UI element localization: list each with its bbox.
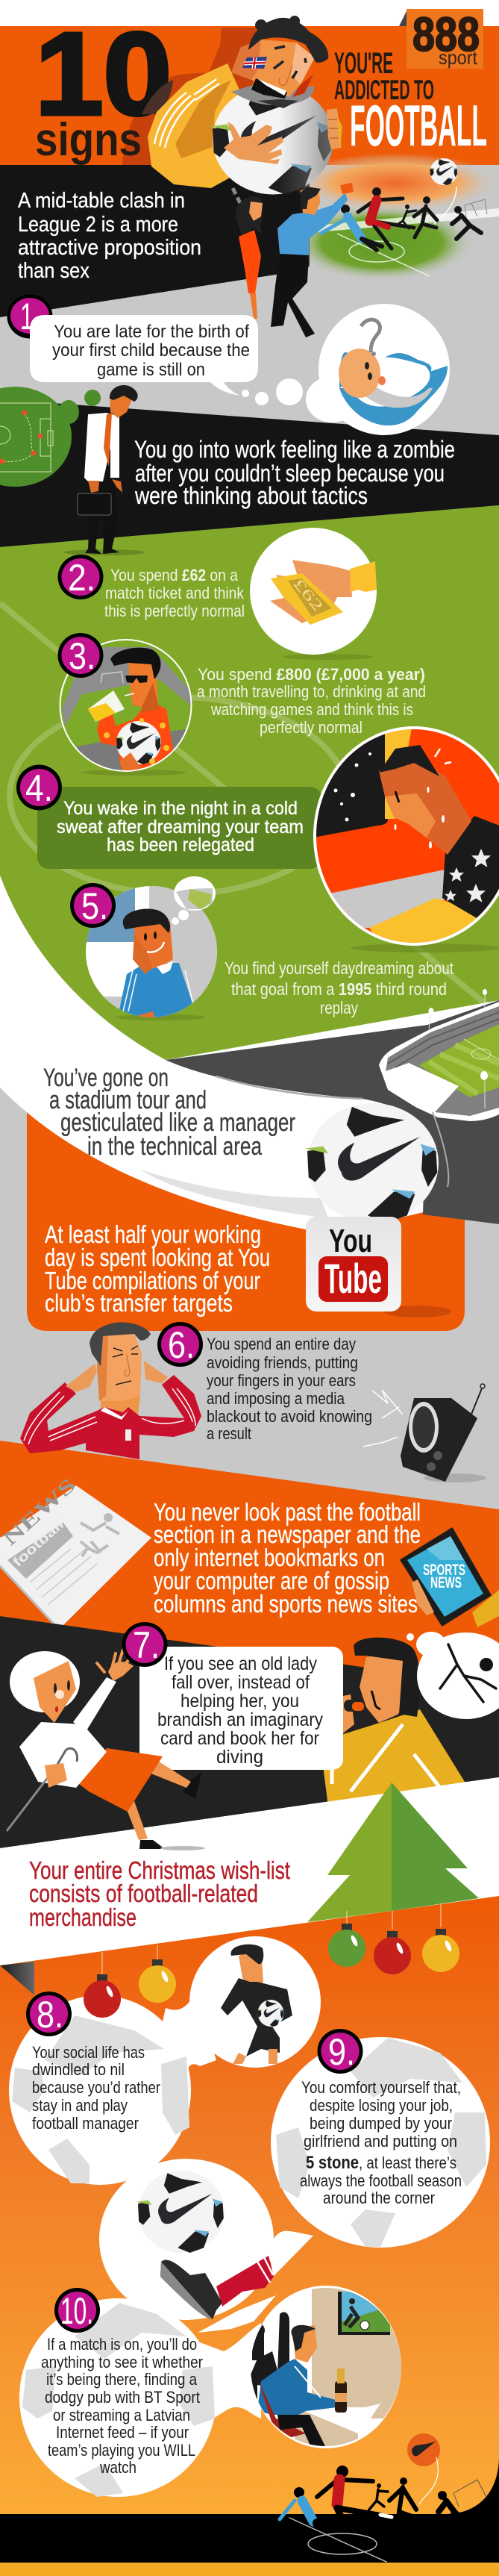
old lady falling bbox=[7, 1650, 205, 1850]
sign 5: illustration bbox=[86, 876, 220, 1020]
sign 5: text bbox=[225, 958, 454, 1017]
newspaper text bbox=[154, 1498, 421, 1618]
sign 5: text: that goal from a 1995 third round bbox=[231, 979, 447, 999]
sign 6: man with fingers in ears bbox=[20, 1322, 201, 1459]
ten overlap tint bbox=[142, 80, 173, 114]
stadium tour text: in the technical area bbox=[87, 1132, 262, 1161]
sign 1: speech bubble bbox=[30, 315, 258, 396]
christmas tree bbox=[307, 1783, 479, 1922]
sign 3: text: perfectly normal bbox=[260, 718, 363, 737]
newspaper text: columns and sports news sites bbox=[154, 1590, 418, 1618]
sign 6: text: blackout to avoid knowing bbox=[207, 1407, 372, 1426]
sign 9: badge bbox=[318, 2029, 363, 2074]
intro text: attractive proposition bbox=[18, 236, 201, 260]
woman bbox=[236, 196, 263, 319]
sign 9: text: being dumped by your bbox=[310, 2114, 452, 2133]
YouTube text: At least half your working bbox=[45, 1220, 261, 1248]
grey swoosh bbox=[140, 1170, 328, 1218]
sign 8: text: dwindled to nil bbox=[32, 2060, 125, 2079]
logo: 888 sport: sport bbox=[439, 46, 478, 69]
christmas text bbox=[29, 1856, 290, 1931]
sign 4: text bbox=[57, 798, 304, 855]
sign 9: text: 5 stone, at least there’s bbox=[306, 2153, 456, 2173]
newspaper text: You never look past the football bbox=[154, 1498, 421, 1526]
sign 9: text: girlfriend and putting on bbox=[304, 2132, 457, 2151]
stadium tour text: a stadium tour and bbox=[49, 1086, 207, 1114]
sign 1: speech bubble: You are late for the birth of bbox=[54, 322, 249, 342]
christmas text: merchandise bbox=[29, 1903, 136, 1931]
white football blobs bbox=[9, 1936, 490, 2497]
sign 7: badge bbox=[122, 1622, 167, 1667]
intro text bbox=[18, 189, 201, 283]
sign 9: text: You comfort yourself that, bbox=[301, 2078, 461, 2097]
orange diagonal band bbox=[0, 1441, 499, 1688]
stadium tour text: You’ve gone on bbox=[43, 1064, 169, 1092]
tablet: SPORTS bbox=[423, 1562, 465, 1579]
orange lower section bbox=[0, 1896, 499, 2514]
black intro panel bbox=[0, 165, 310, 317]
pitch scene bbox=[289, 153, 499, 281]
logo: 888 sport bbox=[399, 7, 483, 69]
sign 7: text box: brandish an imaginary bbox=[157, 1709, 323, 1730]
sign 8: badge bbox=[26, 1992, 72, 2036]
sign 10: text: If a match is on, you’ll do bbox=[47, 2335, 197, 2354]
bottom players silhouettes bbox=[280, 2466, 486, 2562]
flag on cheek bbox=[242, 57, 267, 69]
title: signs: signs bbox=[35, 114, 142, 166]
sign 7: text box: If you see an old lady bbox=[164, 1653, 317, 1674]
sign 6: text: and imposing a media bbox=[207, 1389, 345, 1408]
sign 9: text: always the football season bbox=[300, 2171, 462, 2190]
sign 1: speech bubble: game is still on bbox=[97, 360, 205, 380]
sign 10: text: Internet feed – if your bbox=[56, 2423, 189, 2442]
sign 1: speech bubble: your first child because the bbox=[52, 340, 250, 361]
YouTube text: Tube compilations of your bbox=[45, 1267, 260, 1294]
YouTube text: club’s transfer targets bbox=[45, 1289, 233, 1317]
newspaper: football bbox=[10, 1517, 66, 1570]
dark triangle fold bbox=[0, 1962, 34, 1995]
YouTube icon bbox=[306, 1217, 451, 1317]
sign 10: badge bbox=[54, 2288, 100, 2333]
sign 2: text bbox=[104, 566, 245, 620]
black footer bbox=[0, 2456, 499, 2576]
sign 2: badge: 2. bbox=[68, 557, 95, 599]
sign 5: text: You find yourself daydreaming about bbox=[225, 958, 454, 978]
intro text: League 2 is a more bbox=[18, 213, 178, 237]
sign 6: text: You spend an entire day bbox=[207, 1335, 356, 1353]
dark stadium wave bbox=[166, 1000, 499, 1224]
sign 8: text: football manager bbox=[32, 2114, 139, 2133]
sign 3: text: a month travelling to, drinking at and bbox=[197, 682, 426, 701]
intro text: A mid-table clash in bbox=[18, 189, 185, 213]
sign 10: text bbox=[41, 2335, 203, 2477]
sign 7: badge: 7. bbox=[133, 1624, 160, 1666]
tactics text: were thinking about tactics bbox=[134, 482, 368, 509]
thought bubble: dive bbox=[407, 1632, 499, 1719]
sign 4: text: has been relegated bbox=[107, 835, 254, 855]
sign 3: text: watching games and think this is bbox=[210, 700, 413, 719]
header backdrop shape bbox=[122, 28, 256, 165]
sign 5: badge bbox=[70, 883, 116, 928]
sign 5: badge: 5. bbox=[81, 885, 108, 927]
sign 6: text: avoiding friends, putting bbox=[207, 1353, 358, 1372]
black band: tactics bbox=[0, 399, 499, 547]
YouTube icon: You bbox=[329, 1223, 372, 1259]
referee bbox=[271, 183, 354, 337]
ball and boot bbox=[136, 2171, 274, 2319]
players silhouettes bbox=[321, 187, 481, 250]
YouTube text: day is spent looking at You bbox=[45, 1244, 270, 1271]
sign 8: text: stay in and play bbox=[32, 2096, 128, 2115]
christmas text: Your entire Christmas wish-list bbox=[29, 1856, 290, 1884]
football flying bbox=[430, 158, 458, 185]
white wave bbox=[0, 876, 499, 1229]
stadium bbox=[379, 989, 499, 1121]
sign 1: badge bbox=[7, 294, 52, 339]
sign 4: text: sweat after dreaming your team bbox=[57, 817, 304, 838]
sign 7: text box bbox=[139, 1647, 343, 1770]
title: 10: 10 bbox=[35, 9, 172, 140]
sign 4: panel bbox=[37, 787, 321, 869]
newspaper text: only internet bookmarks on bbox=[154, 1544, 385, 1571]
black band: diving bbox=[0, 1616, 499, 1848]
sign 9: text: despite losing your job, bbox=[310, 2096, 453, 2115]
sign 7: text box: card and book her for bbox=[160, 1728, 319, 1749]
man hugging ball bbox=[148, 16, 342, 194]
referee with whistle bbox=[321, 1638, 465, 1806]
stadium tour text: gesticulated like a manager bbox=[60, 1108, 295, 1137]
pitch markings on green bbox=[0, 603, 499, 1015]
sign 8: text: Your social life has bbox=[32, 2043, 145, 2062]
sign 5: text: replay bbox=[320, 998, 358, 1017]
sign 3: illustration bbox=[60, 639, 194, 776]
white christmas area bbox=[0, 1777, 499, 1965]
sign 4: text: You wake in the night in a cold bbox=[63, 798, 298, 819]
sign 6: text bbox=[207, 1335, 372, 1443]
sign 10: badge: 10. bbox=[60, 2290, 93, 2332]
newspaper text: section in a newspaper and the bbox=[154, 1521, 421, 1548]
sign 2: text: this is perfectly normal bbox=[104, 602, 245, 620]
sign 10: text: or streaming a Latvian bbox=[53, 2406, 190, 2424]
sign 10: text: anything to see it whether bbox=[41, 2353, 203, 2371]
title: you're addicted to: YOU'RE bbox=[334, 47, 393, 80]
sign 10: pub scene bbox=[245, 2288, 405, 2452]
tablet: NEWS bbox=[430, 1574, 462, 1591]
sign 9: text: around the corner bbox=[323, 2189, 435, 2207]
sign 8: text: because you’d rather bbox=[32, 2078, 160, 2097]
thought bubble: baby bbox=[242, 304, 450, 435]
sign 1: badge: 1. bbox=[20, 296, 40, 337]
intro text: than sex bbox=[18, 259, 90, 283]
newspaper text: your computer are of gossip bbox=[154, 1567, 389, 1594]
sign 9: text bbox=[300, 2078, 462, 2207]
dashes from thought bbox=[233, 188, 240, 203]
tablet bbox=[401, 1529, 499, 1627]
orange YouTube panel bbox=[27, 1105, 465, 1331]
zombie man bbox=[63, 385, 145, 555]
sign 3: badge: 3. bbox=[69, 635, 95, 677]
newspaper bbox=[0, 1473, 151, 1630]
ball pattern on blobs bbox=[12, 2015, 486, 2497]
sign 8: player figure bbox=[221, 1945, 292, 2064]
sign 4: illustration bbox=[313, 724, 499, 955]
sign 2: ticket illustration: £62 bbox=[289, 576, 326, 615]
sign 7: text box: fall over, instead of bbox=[172, 1672, 310, 1693]
stadium tour text bbox=[43, 1064, 295, 1161]
logo: 888 sport: 888 bbox=[412, 7, 480, 61]
sign 3: text bbox=[197, 665, 426, 737]
title: you're addicted to bbox=[334, 47, 434, 105]
YouTube icon: Tube bbox=[324, 1255, 382, 1302]
sign 4: badge bbox=[16, 764, 62, 811]
sign 2: text: match ticket and think bbox=[105, 584, 245, 602]
newspaper: NEWS bbox=[0, 1473, 80, 1550]
sign 7: text box: helping her, you bbox=[181, 1691, 299, 1712]
bottom football bbox=[407, 2433, 440, 2504]
sign 6: text: your fingers in your ears bbox=[207, 1371, 356, 1390]
sign 6: text: a result bbox=[207, 1424, 251, 1443]
christmas text: consists of football-related bbox=[29, 1880, 258, 1907]
sign 8: text bbox=[32, 2043, 160, 2133]
sign 3: badge bbox=[58, 633, 103, 678]
big football bbox=[304, 1103, 448, 1223]
baubles bbox=[84, 1903, 459, 2018]
sign 7: text box: diving bbox=[216, 1747, 263, 1768]
radio bbox=[363, 1384, 486, 1482]
sign 4: badge: 4. bbox=[25, 767, 53, 809]
sign 6: badge: 6. bbox=[168, 1324, 195, 1366]
football being hugged bbox=[210, 85, 333, 194]
sign 10: text: team’s playing you WILL bbox=[48, 2441, 195, 2460]
sign 2: badge bbox=[58, 555, 103, 599]
green tactics thought bubble bbox=[0, 387, 101, 487]
sign 9: badge: 9. bbox=[328, 2031, 355, 2073]
sign 2: ticket illustration bbox=[250, 528, 377, 660]
sign 8: badge: 8. bbox=[37, 1994, 63, 2036]
sign 10: text: watch bbox=[99, 2458, 136, 2477]
sign 10: text: it’s being there, finding a bbox=[46, 2370, 198, 2389]
YouTube text bbox=[45, 1220, 270, 1317]
sign 6: badge bbox=[157, 1322, 203, 1367]
sign 10: text: dodgy pub with BT Sport bbox=[45, 2388, 200, 2407]
sign 3: text: You spend £800 (£7,000 a year) bbox=[198, 665, 425, 684]
tactics text bbox=[134, 436, 455, 509]
green field bbox=[0, 505, 499, 1060]
sign 2: text: You spend £62 on a bbox=[110, 566, 239, 584]
